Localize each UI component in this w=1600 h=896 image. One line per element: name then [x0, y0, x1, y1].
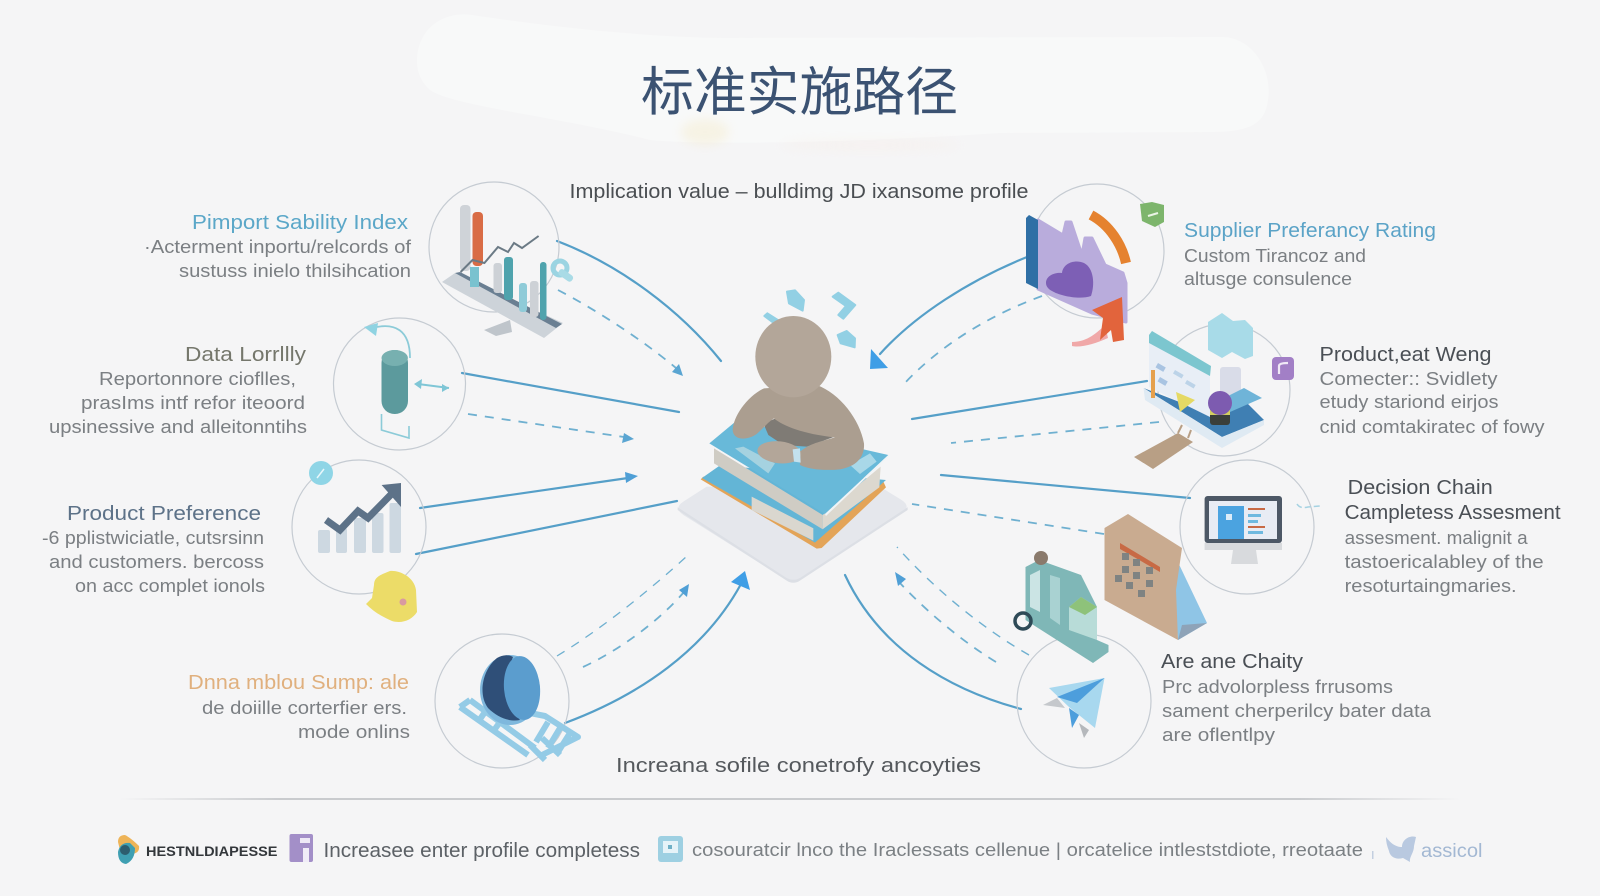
- node circle 1: [429, 182, 559, 312]
- node circle 6: [1158, 324, 1290, 456]
- text: Decision Chain: Decision Chain: [1348, 477, 1493, 499]
- text: Data Lorrllly: upsinessive and alleitonntihs: [49, 417, 307, 437]
- text: Are ane Chaity: Are ane Chaity: [1161, 651, 1303, 673]
- text: Product Preference: and customers. bercoss: [49, 552, 264, 572]
- text: Product,eat Weng: Comecter:: Svidlety: [1320, 369, 1498, 389]
- text: Product,eat Weng: Product,eat Weng: [1320, 344, 1492, 366]
- text: Pimport Sability Index: Pimport Sability Index: [192, 212, 408, 234]
- panel: Supplier Preferancy Rating: [1026, 184, 1436, 347]
- upper book: [709, 421, 889, 529]
- icon: hand and heart with arrow: [1026, 202, 1164, 347]
- text: Product,eat Weng: [1320, 344, 1544, 437]
- text: Data Lorrllly: Reportonnore cioflles,: [99, 369, 296, 389]
- footer label: HESTNLDIAPESSE: [146, 844, 278, 859]
- icon: rising bars: [309, 461, 417, 622]
- icon: dashboard screen on slab: [1134, 313, 1294, 469]
- icon: bird: [1386, 837, 1416, 862]
- text: Are ane Chaity: sament cherperilcy bater data: [1162, 701, 1432, 721]
- platform: [678, 487, 907, 582]
- person: [733, 316, 864, 470]
- central figure on books: [678, 290, 908, 583]
- icon: paper plane: [1043, 678, 1104, 738]
- arrows from left nodes: [416, 241, 750, 723]
- text: Decision Chain: Campletess Assesment: [1345, 502, 1561, 524]
- text: Product Preference: on acc complet ionols: [75, 576, 265, 596]
- node circle 8: [1017, 634, 1151, 768]
- icon: bar chart on stand: [442, 205, 574, 338]
- text: Are ane Chaity: Prc advolorpless frrusoms: [1162, 677, 1393, 697]
- lower book: [701, 465, 886, 549]
- footer text: description: cosouratcir lnco the Iraclessats cellenue | orcatelice intleststdiote, rreotaate: [692, 839, 1363, 860]
- text: Supplier Preferancy Rating: altusge consulence: [1184, 269, 1352, 289]
- text: Product,eat Weng: cnid comtakiratec of fowy: [1320, 417, 1544, 437]
- text: Data Lorrllly: prasIms intf refor iteoord: [81, 393, 305, 413]
- title: 标准实施路径: [641, 63, 958, 122]
- footer text: assicol: assicol: [1421, 841, 1482, 862]
- footer text: profile completess: Increasee enter profile completess: [324, 840, 640, 862]
- icon: monitor: [1205, 496, 1320, 564]
- text: Data Lorrllly: Data Lorrllly: [185, 344, 306, 366]
- icon: isometric buildings: [1015, 551, 1108, 663]
- footer bar: [118, 834, 1482, 864]
- text: Product Preference: [42, 503, 265, 596]
- text: Pimport Sability Index: sustuss inielo thilsihcation: [179, 261, 411, 281]
- node circle 7: [1180, 460, 1314, 594]
- text: Are ane Chaity: [1161, 651, 1432, 745]
- text: Dnna mblou Sump:ale: mode onlins: [298, 722, 410, 742]
- icon: footer logo: [118, 835, 139, 864]
- panel: Are ane Chaity: [1015, 551, 1432, 768]
- text: Dnna mblou Sump:ale: Dnna mblou Sump: ale: [188, 672, 409, 694]
- bottom caption: Increana sofile conetrofy ancoyties: [616, 755, 981, 777]
- text: Decision Chain: resoturtaingmaries.: [1345, 576, 1517, 596]
- icon: calendar board: [1104, 514, 1207, 640]
- icon: teal screen: [658, 836, 683, 862]
- text: Dnna mblou Sump:ale: [188, 672, 410, 742]
- floating shapes: [764, 290, 855, 347]
- text: Pimport Sability Index: [144, 212, 412, 281]
- title brush backdrop: [417, 14, 1269, 151]
- text: Decision Chain: assesment. malignit a: [1345, 528, 1529, 548]
- node circle 2: [334, 318, 466, 450]
- text: Product,eat Weng: etudy stariond eirjos: [1320, 392, 1498, 412]
- text: Decision Chain: tastoericalabley of the: [1345, 552, 1544, 572]
- panel: Decision Chain: [1104, 460, 1561, 640]
- icon: cylinder with arrows: [364, 323, 449, 438]
- icon: purple page: [290, 834, 313, 862]
- text: Data Lorrllly: [49, 344, 307, 437]
- panel: Pimport Sability Index: [144, 182, 574, 338]
- panel: Data Lorrllly: [49, 318, 466, 450]
- panel: Product,eat Weng: [1134, 313, 1544, 469]
- arrows from right nodes: [845, 257, 1190, 709]
- node circle 3: [292, 460, 426, 594]
- text: Dnna mblou Sump:ale: de doiille corterfier ers.: [202, 698, 407, 718]
- text: Are ane Chaity: are oflentlpy: [1162, 725, 1275, 745]
- text: Product Preference: Product Preference: [67, 503, 261, 525]
- top caption: Implication value – bulldimg JD ixansome profile: [570, 181, 1028, 203]
- icon: dome on lattice: [460, 655, 578, 760]
- node circle 5: [1030, 184, 1164, 318]
- text: Supplier Preferancy Rating: [1184, 220, 1436, 289]
- text: Product Preference: -6 pplistwiciatle, cutsrsinn: [42, 528, 264, 548]
- panel: Dnna mblou Sump:ale: [188, 634, 578, 768]
- text: Pimport Sability Index: ·Acterment inportu/relcords of: [144, 237, 412, 257]
- text: Supplier Preferancy Rating: Custom Tirancoz and: [1184, 246, 1366, 266]
- text: Decision Chain: [1345, 477, 1561, 596]
- panel: Product Preference: [42, 460, 426, 622]
- text: Supplier Preferancy Rating: Supplier Preferancy Rating: [1184, 220, 1436, 242]
- node circle 4: [435, 634, 569, 768]
